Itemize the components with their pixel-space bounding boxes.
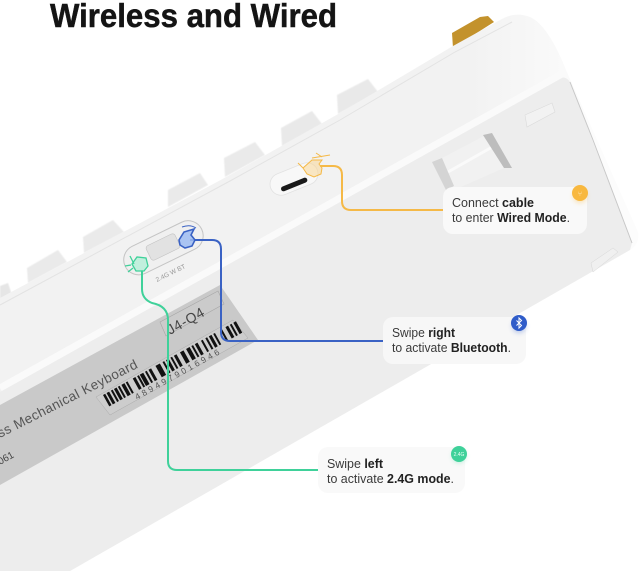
icon: hand orange	[298, 153, 330, 177]
connector: 2.4G	[142, 270, 319, 470]
icon: 2.4G badge: 2.4G	[454, 452, 465, 458]
mode switch: 2.4G W BT	[155, 263, 187, 284]
model box	[160, 291, 224, 338]
kickstand	[432, 133, 512, 190]
rubber foot lower	[591, 248, 618, 272]
icon: hand green	[125, 256, 148, 272]
top edge lip	[0, 22, 512, 305]
product label	[0, 285, 258, 485]
callout: wired	[443, 185, 588, 234]
icon: hand blue	[179, 226, 196, 248]
model box: J4-Q4	[164, 304, 207, 338]
callout: wired: to enter Wired Mode.	[452, 210, 570, 225]
barcode: 4894979016946	[133, 347, 221, 402]
mode switch	[119, 216, 208, 284]
icon: 2.4G badge	[451, 446, 467, 463]
connector: bluetooth	[190, 240, 384, 341]
callout: wired: Connect cable	[452, 195, 534, 210]
yellow key	[452, 16, 494, 48]
USB-C port	[267, 159, 321, 199]
row of keycaps	[0, 79, 378, 300]
icon: bluetooth badge	[511, 315, 527, 333]
connector: wired	[320, 166, 444, 210]
callout: 2.4G	[318, 446, 467, 493]
callout: 2.4G: to activate 2.4G mode.	[327, 471, 454, 486]
icon: wired badge: ⑂	[578, 191, 582, 198]
ridge	[0, 74, 562, 388]
callout: bluetooth: Swipe right	[392, 325, 456, 340]
barcode	[96, 320, 248, 415]
callout: 2.4G: Swipe left	[327, 456, 384, 471]
callout: bluetooth	[383, 315, 527, 364]
icon: wired badge	[572, 185, 588, 203]
callout: bluetooth: to activate Bluetooth.	[392, 340, 511, 355]
right inner line	[570, 82, 632, 243]
rubber foot upper	[525, 103, 555, 127]
